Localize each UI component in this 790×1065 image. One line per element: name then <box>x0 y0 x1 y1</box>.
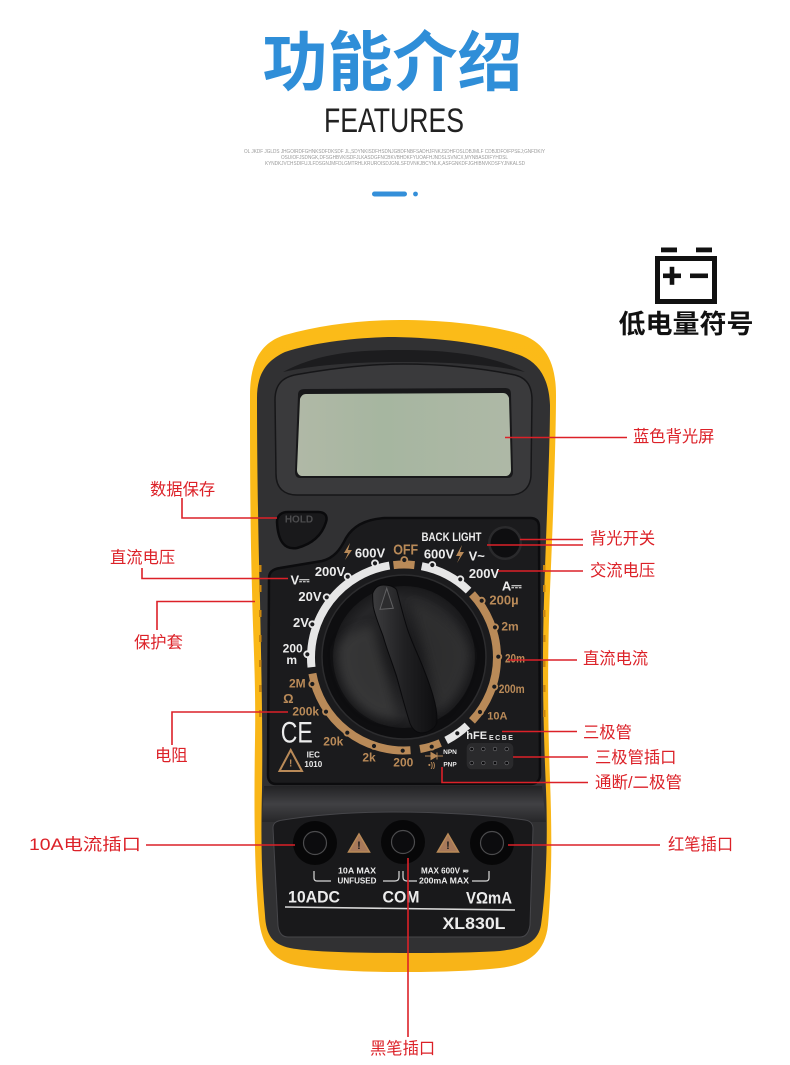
dial scale labels: A⎓ <box>502 578 522 594</box>
dial scale labels: OFF <box>393 542 418 558</box>
callout: red probe jack: 红笔插口 <box>668 836 733 854</box>
small filler text: KYNDKJVCHSDIFUJLFDSGNJMFDLGMTRHLKRUROISDJGNLSFDVNKJBCYNLK,ASFGNKDFJGHIBNVKDSFYJNKALSD <box>265 161 525 167</box>
callout: data hold: 数据保存 <box>150 481 215 499</box>
jack names <box>288 888 512 908</box>
input jacks <box>293 820 514 865</box>
callout: DC current: 直流电流 <box>583 650 648 668</box>
CE mark: CE <box>281 716 313 750</box>
dial scale labels: 200V <box>469 566 500 581</box>
model name: XL830L <box>442 915 506 933</box>
callout: 10A current jack: 10A电流插口 <box>29 836 141 854</box>
callout: continuity and diode <box>442 767 682 792</box>
jack brackets <box>314 871 489 881</box>
dial scale labels: Ω <box>283 691 294 706</box>
callout: black probe jack: 黑笔插口 <box>370 1040 435 1058</box>
dial scale labels: 2M <box>289 676 306 690</box>
IEC warning triangle: ! <box>289 758 292 770</box>
callout: DC voltage: 直流电压 <box>110 549 175 567</box>
warning triangles: ! <box>446 840 450 852</box>
small filler text: OL JKDF JGLDS JHGOIRDFGHNKSDFDKSDF JL,SDYNKISDFHSDNJGBDFNBFSADHJFNKJSDHFOSLDBJMLF CDBJDFOIFPSEJ;GNFDKIY <box>244 149 546 155</box>
callout: transistor socket: 三极管插口 <box>595 749 676 767</box>
callout: backlight switch <box>487 530 655 548</box>
dial scale labels: ECBE <box>489 735 514 742</box>
dial scale labels: •)) <box>428 762 435 770</box>
dial scale labels: 20V <box>298 589 322 604</box>
callout: continuity and diode: 通断/二极管 <box>595 774 682 792</box>
IEC 1010 label <box>304 750 323 769</box>
callout: AC voltage: 交流电压 <box>590 562 655 580</box>
side ribs <box>259 565 546 717</box>
jack panel <box>273 812 533 937</box>
dial scale labels: 10A <box>487 711 507 723</box>
yellow protective case <box>250 320 556 972</box>
callout: blue backlit screen: 蓝色背光屏 <box>633 428 714 446</box>
subtitle: FEATURES: FEATURES <box>324 102 464 140</box>
dial scale labels <box>283 542 525 770</box>
shoulder band between dial and jacks <box>262 786 546 822</box>
dial scale labels: 200m <box>499 682 525 696</box>
callout: protective case: 保护套 <box>134 634 183 652</box>
decorative pill and dot <box>372 192 418 196</box>
HOLD button: HOLD <box>285 514 313 526</box>
dial scale labels: 20k <box>323 735 344 749</box>
backlight label: BACK LIGHT <box>422 530 482 544</box>
dial scale labels: 200k <box>292 705 319 719</box>
dial position dots <box>304 557 501 754</box>
black housing <box>257 337 550 953</box>
IEC 1010 label: IEC <box>307 750 320 760</box>
HOLD button <box>277 512 327 548</box>
jack ratings: 10A MAX <box>338 866 377 876</box>
dial scale labels: 200V <box>315 564 346 579</box>
callout: transistor <box>502 724 632 742</box>
icon: low battery symbol <box>658 248 714 302</box>
dial scale labels: PNP <box>443 762 457 768</box>
pointer triangle <box>380 588 393 609</box>
jack ratings: MAX 600V ≂ <box>421 866 469 876</box>
callout: data hold <box>150 481 277 518</box>
dial scale labels: 2k <box>362 750 376 764</box>
housing shadow above screen <box>283 350 525 372</box>
dial scale labels: hFE <box>466 730 487 742</box>
jack names: VΩmA <box>466 888 512 908</box>
IEC warning triangle <box>280 750 302 771</box>
jack names: COM <box>382 888 420 906</box>
callout: DC voltage <box>110 549 288 578</box>
dial scale labels: 600V <box>424 546 455 562</box>
IEC 1010 label: 1010 <box>304 760 323 769</box>
callout: protective case <box>134 602 255 652</box>
dial scale labels: 2m <box>501 620 519 634</box>
dial scale labels: NPN <box>443 749 457 756</box>
callout: backlight switch: 背光开关 <box>590 530 655 548</box>
dial panel <box>268 518 540 784</box>
dial scale labels: 20m <box>505 651 525 665</box>
jack ratings: 200mA MAX <box>419 876 470 886</box>
screen frame <box>275 364 532 495</box>
dial scale labels: 200µ <box>489 592 519 608</box>
multimeter <box>250 320 556 972</box>
dial scale labels: V⎓ <box>290 572 310 588</box>
callout: resistance <box>155 712 288 765</box>
title: 功能介绍 <box>262 26 522 99</box>
dial scale labels: 2V <box>293 615 309 630</box>
dial scale labels: 200 <box>283 641 303 655</box>
backlight button <box>488 526 522 560</box>
callout: transistor: 三极管 <box>583 724 632 742</box>
dial scale labels: 200 <box>393 755 414 769</box>
jack ratings: UNFUSED <box>338 876 377 886</box>
small filler text: OSUIOFJSDNGK,DFSGHBVKISDFJLKASDGFNCBKVBHDKFYUOAFHJNDSLSVNCX,MYNBASDIFYHDSL <box>281 155 508 161</box>
dial scale arcs <box>311 565 497 751</box>
small filler text <box>244 149 546 167</box>
LCD screen <box>297 393 511 476</box>
jack names: 10ADC <box>288 888 340 906</box>
hFE socket <box>467 743 513 769</box>
warning triangles <box>348 834 458 852</box>
jack ratings <box>338 866 470 886</box>
knob handle <box>373 585 437 733</box>
low battery label: 低电量符号 <box>618 309 754 339</box>
callout: resistance: 电阻 <box>155 747 188 765</box>
rotary knob <box>322 575 486 739</box>
knob lit wedges <box>338 625 398 718</box>
dial scale labels: 600V <box>355 546 386 560</box>
screen bezel inner edge <box>295 388 513 478</box>
dial scale labels: V~ <box>469 548 485 564</box>
warning triangles: ! <box>357 840 361 852</box>
dial scale labels: m <box>286 653 297 667</box>
